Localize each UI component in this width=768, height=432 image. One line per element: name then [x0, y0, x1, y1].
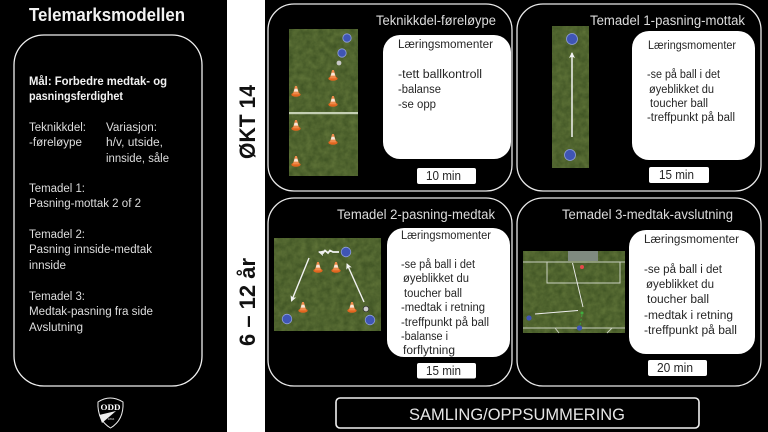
title: Telemarksmodellen: [29, 5, 185, 25]
theme 2 text: Temadel 2:: [29, 229, 85, 241]
drill diagram: cones and players: [289, 29, 358, 176]
panel heading: Temadel 1-pasning-mottak: [590, 13, 745, 28]
variation text: [106, 122, 169, 165]
theme 3 text: [29, 291, 153, 334]
learning points box: -se opp: [398, 99, 436, 111]
learning points box: toucher ball: [650, 98, 708, 110]
panel: session overview: [14, 35, 202, 386]
learning points box: -treffpunkt på ball: [644, 325, 737, 337]
panel: theme 1: [517, 4, 761, 191]
icon: club logo shield: 1894: [108, 417, 115, 421]
technique part text: Teknikkdel:: [29, 122, 86, 134]
technique part text: -føreløype: [29, 137, 82, 149]
learning points box: øyeblikket du: [403, 273, 469, 285]
theme 3 text: Avslutning: [29, 322, 83, 334]
learning points box: Læringsmomenter: [398, 39, 493, 51]
learning points box: Læringsmomenter: [644, 234, 739, 246]
learning points box: toucher ball: [647, 294, 709, 306]
variation text: h/v, utside,: [106, 137, 163, 149]
goal text: pasningsferdighet: [29, 91, 123, 103]
learning points box: -balanse: [398, 84, 441, 96]
learning points box: Læringsmomenter: [401, 230, 491, 242]
panel heading: Temadel 3-medtak-avslutning: [562, 207, 733, 222]
left column background: [0, 0, 227, 432]
right column background: [265, 0, 768, 432]
learning points box: -treffpunkt på ball: [401, 317, 489, 329]
goal text: Mål: Forbedre medtak- og: [29, 76, 167, 88]
drill diagram: pass between two players: [552, 26, 589, 168]
duration badge: 15 min: [426, 364, 461, 378]
theme 2 text: [29, 229, 152, 272]
theme 3 text: Medtak-pasning fra side: [29, 306, 153, 318]
vertical white strip: [227, 0, 265, 432]
learning points box: -medtak i retning: [401, 302, 485, 314]
learning points box: [383, 35, 511, 159]
learning points box: -se på ball i det: [647, 69, 721, 81]
learning points box: -medtak i retning: [644, 310, 733, 322]
learning points box: -tett ballkontroll: [398, 69, 482, 81]
learning points box: øyeblikket du: [646, 279, 714, 291]
learning points box: Læringsmomenter: [648, 40, 736, 52]
panel: theme 2: [268, 198, 512, 386]
summary bar: SAMLING/OPPSUMMERING: [409, 406, 625, 424]
summary bar: [336, 398, 699, 428]
learning points box: -se på ball i det: [644, 264, 723, 276]
drill diagram: passing square: [274, 238, 381, 331]
panel: theme 3: [517, 198, 761, 386]
learning points box: -se på ball i det: [401, 259, 476, 271]
learning points box: -balanse i: [401, 331, 448, 343]
theme 2 text: Pasning innside-medtak: [29, 244, 152, 256]
panel heading: Teknikkdel-føreløype: [376, 13, 496, 28]
theme 2 text: innside: [29, 260, 66, 272]
panel heading: Temadel 2-pasning-medtak: [337, 207, 495, 222]
theme 1 text: [29, 183, 141, 210]
learning points box: øyeblikket du: [649, 84, 714, 96]
theme 1 text: Pasning-mottak 2 of 2: [29, 198, 141, 210]
learning points box: [629, 230, 755, 354]
learning points box: -treffpunkt på ball: [647, 112, 735, 124]
duration badge: [417, 363, 476, 378]
theme 1 text: Temadel 1:: [29, 183, 85, 195]
learning points box: [632, 31, 755, 160]
learning points box: forflytning: [403, 345, 455, 357]
duration badge: [648, 360, 707, 376]
panel: technique part: [268, 4, 512, 191]
learning points box: toucher ball: [404, 288, 462, 300]
duration badge: 15 min: [659, 168, 694, 182]
duration badge: 20 min: [657, 361, 693, 375]
theme 3 text: Temadel 3:: [29, 291, 85, 303]
icon: club logo shield: [98, 398, 123, 428]
drill diagram: goal area finishing: [523, 251, 625, 333]
technique part text: [29, 122, 86, 149]
goal text: [29, 76, 167, 103]
duration badge: [417, 168, 476, 184]
vertical label: age group: 6 – 12 år: [235, 258, 260, 346]
learning points box: [387, 228, 510, 357]
icon: club logo shield: ODD: [100, 403, 121, 412]
vertical label: session: ØKT 14: [235, 84, 260, 159]
duration badge: 10 min: [426, 169, 461, 183]
duration badge: [649, 167, 709, 183]
variation text: Variasjon:: [106, 122, 157, 134]
variation text: innside, såle: [106, 153, 169, 165]
